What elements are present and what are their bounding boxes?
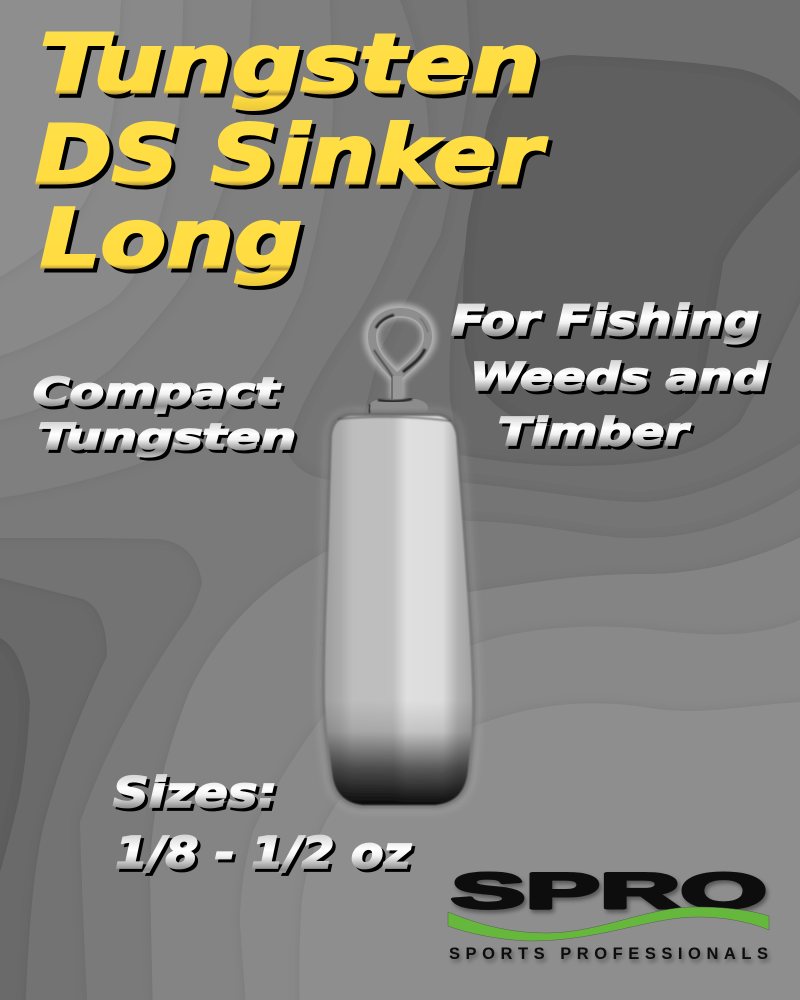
callout: for fishing weeds and timber: Timber (498, 410, 691, 454)
logo green swoosh (448, 907, 769, 941)
sinker body (325, 416, 472, 805)
logo: SPRO (448, 863, 769, 963)
callout: sizes: Sizes: (113, 768, 277, 817)
callout: for fishing weeds and timber (451, 296, 768, 454)
title: Tungsten (40, 18, 540, 112)
logo wordmark: SPRO (451, 863, 767, 919)
callout: for fishing weeds and timber: Weeds and (470, 355, 768, 399)
logo tagline: SPORTS PROFESSIONALS (449, 945, 768, 963)
callout: compact tungsten (33, 370, 296, 458)
callout: compact tungsten: Compact (33, 370, 281, 414)
callout: compact tungsten: Tungsten (38, 417, 296, 458)
callout: for fishing weeds and timber: For Fishing (451, 296, 759, 345)
eye ring (372, 312, 428, 400)
title: DS Sinker (35, 109, 548, 203)
callout: sizes: 1/8 - 1/2 oz (115, 828, 411, 879)
product illustration: sinker (325, 311, 472, 805)
callout: sizes (113, 768, 411, 879)
title (35, 18, 548, 287)
collar (368, 399, 428, 415)
glow halo (325, 311, 472, 805)
title: Long (40, 193, 302, 287)
